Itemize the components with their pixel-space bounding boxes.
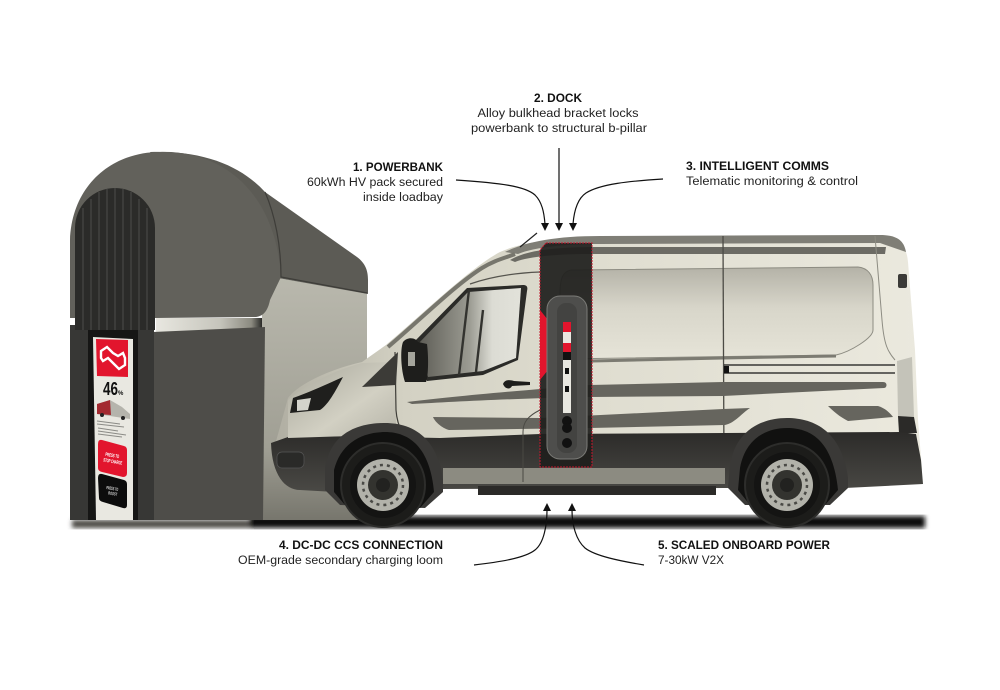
docked powerbank — [547, 296, 587, 459]
charging slot — [156, 318, 262, 332]
callout 5: scaled onboard power: 5. SCALED ONBOARD POWER — [658, 538, 830, 552]
roof band — [505, 235, 906, 254]
charger dome face — [70, 152, 281, 318]
callout 3: intelligent comms: 3. INTELLIGENT COMMS — [686, 159, 829, 173]
callout 1: powerbank — [307, 160, 444, 204]
callout 3: intelligent comms — [686, 159, 858, 188]
rear wheel — [728, 418, 848, 527]
cargo panel — [560, 267, 873, 359]
stop charge button: PRESS TO — [105, 452, 120, 460]
arrow 4 — [474, 503, 551, 565]
arrow 2 — [555, 148, 563, 231]
cab door rear curve — [523, 410, 540, 482]
side stripe lower — [433, 408, 750, 430]
a-pillar band — [388, 254, 515, 347]
screen frame — [88, 330, 138, 520]
mini ports — [562, 416, 572, 448]
stop charge button — [98, 440, 127, 477]
callout 1: powerbank: 1. POWERBANK — [353, 160, 443, 174]
side rail — [724, 365, 895, 373]
callout 2: dock: 2. DOCK — [534, 91, 582, 105]
charger front column — [70, 325, 154, 520]
callout 2: dock: Alloy bulkhead bracket locks — [478, 106, 638, 120]
door handle — [503, 380, 530, 388]
side stripe upper — [407, 382, 886, 404]
rear pillar line — [875, 236, 895, 360]
front seam — [395, 352, 404, 438]
charger roof — [150, 152, 368, 294]
front wheel — [325, 423, 443, 527]
callout 2: dock: powerbank to structural b-pillar — [471, 121, 647, 135]
arrow 1 — [456, 180, 549, 231]
logo panel — [96, 339, 128, 377]
ground shadow — [72, 516, 925, 528]
mini van — [97, 400, 130, 420]
callout 4: dc-dc ccs connection — [238, 538, 443, 567]
top hinge — [898, 274, 907, 288]
ribbed arch — [75, 188, 155, 330]
sill — [443, 468, 725, 484]
callout 1: powerbank: 60kWh HV pack secured — [307, 175, 443, 189]
antenna — [520, 233, 537, 247]
callout 5: scaled onboard power: 7-30kW V2X — [658, 553, 724, 567]
boost button — [98, 474, 127, 508]
boost button: BOOST — [108, 490, 118, 497]
b-pillar cutaway — [540, 243, 592, 467]
lower body — [271, 432, 923, 492]
panel lower line — [592, 356, 836, 361]
percentage: % — [118, 391, 124, 397]
door top line — [470, 272, 540, 284]
charger seam — [265, 192, 367, 293]
callout 5: scaled onboard power — [658, 538, 830, 567]
red highlight — [540, 310, 548, 380]
rear stripe — [828, 406, 893, 421]
percentage: 46 — [103, 379, 118, 399]
callout 2: dock — [471, 91, 647, 135]
callout 3: intelligent comms: Telematic monitoring & control — [686, 174, 858, 188]
roof stripe — [510, 247, 886, 262]
door seam — [723, 236, 724, 467]
callout 4: dc-dc ccs connection: OEM-grade secondary charging loom — [238, 553, 443, 567]
hood highlight — [288, 362, 396, 438]
powerbank charger — [70, 152, 368, 520]
callout 1: powerbank: inside loadbay — [363, 190, 444, 204]
charger screen — [93, 337, 133, 520]
headlight — [290, 377, 343, 413]
charger lower body — [153, 327, 265, 520]
side step — [478, 486, 716, 495]
callout 4: dc-dc ccs connection: 4. DC-DC CCS CONNECTION — [279, 538, 443, 552]
stop charge button: STOP CHARGE — [103, 457, 123, 467]
van body — [275, 235, 922, 470]
charger light side body — [262, 278, 367, 520]
fog lamp — [277, 452, 304, 468]
arrow 3 — [569, 179, 663, 231]
boost button: PRESS TO — [106, 485, 119, 492]
mini screen — [563, 322, 571, 413]
tail light — [897, 357, 917, 433]
van — [271, 233, 923, 527]
quarter window — [362, 352, 398, 387]
screen small text — [97, 421, 126, 437]
front window — [413, 285, 527, 381]
arrow 5 — [568, 503, 644, 565]
wing mirror — [401, 338, 428, 382]
